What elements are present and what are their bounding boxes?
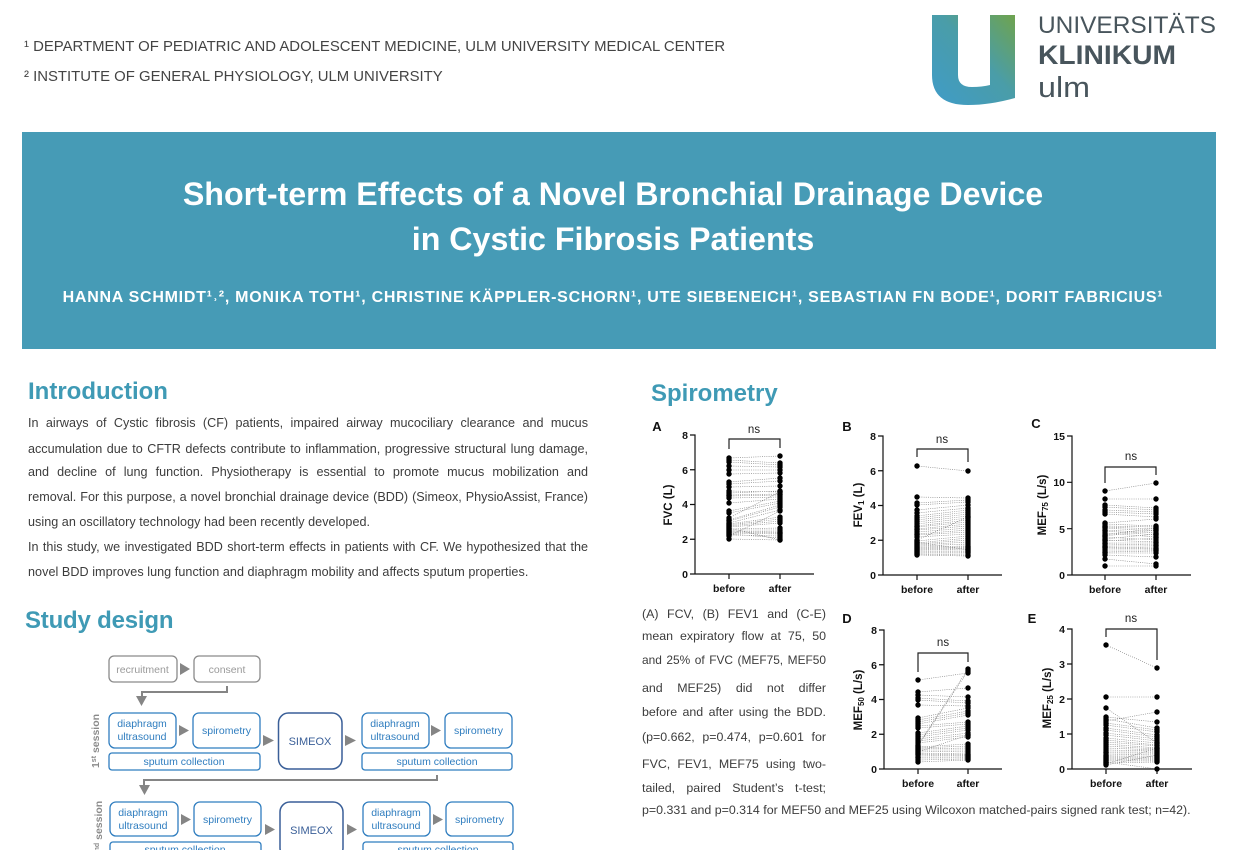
chart B: FEV1: (L) xyxy=(853,482,865,501)
introduction text: accumulation due to CFTR defects contribute to inflammation, progressive structural lung damage, xyxy=(28,442,588,456)
chart B: FEV1: 1 xyxy=(857,500,866,505)
introduction text: and decline of lung function. Physiotherapy is essential to promote mucus mobilization and xyxy=(28,465,588,479)
step: spirometry, session 1 after xyxy=(445,713,512,748)
chart C: MEF75: 5 xyxy=(1059,524,1065,536)
chart B: FEV1: 6 xyxy=(870,466,876,478)
step: spirometry, session 2 after: spirometry xyxy=(455,814,505,826)
chart C: MEF75: (L/s) xyxy=(1037,475,1049,502)
step: diaphragm ultrasound, session 2 before xyxy=(110,802,178,836)
arrow xyxy=(265,824,275,835)
chart B: FEV1: B xyxy=(842,419,852,434)
step: spirometry, session 1 before xyxy=(193,713,260,748)
chart D: MEF50: 2 xyxy=(871,729,877,741)
title: Short-term Effects of a Novel Bronchial Drainage Device xyxy=(183,176,1043,212)
logo: Universitätsklinikum Ulm: KLINIKUM xyxy=(1038,40,1176,70)
chart D: MEF50: after xyxy=(957,778,979,790)
spirometry caption: p=0.331 and p=0.314 for MEF50 and MEF25 using Wilcoxon matched-pairs signed rank test; n=42). xyxy=(642,803,1191,817)
step: diaphragm ultrasound, session 2 after xyxy=(363,802,430,836)
chart E: MEF25: 1 xyxy=(1059,729,1065,741)
logo: Universitätsklinikum Ulm: UNIVERSITÄTS xyxy=(1038,12,1216,39)
step: spirometry, session 2 after xyxy=(446,802,513,836)
arrow xyxy=(433,814,443,825)
heading: Introduction: Introduction xyxy=(28,378,168,405)
chart E: MEF25: 0 xyxy=(1059,764,1065,776)
chart A: FVC: after xyxy=(769,583,791,595)
header banner xyxy=(22,132,1216,349)
introduction text xyxy=(28,416,588,579)
heading: Study design: Study design xyxy=(25,607,173,634)
chart A: FVC: 8 xyxy=(682,430,688,442)
spirometry caption xyxy=(642,607,1191,817)
chart C: MEF75: 75 xyxy=(1041,502,1050,511)
chart A: FVC: FVC (L) xyxy=(663,484,675,525)
chart D: MEF50: before xyxy=(902,778,934,790)
chart A: FVC: ns xyxy=(748,424,760,436)
spirometry caption: FVC, FEV1, MEF75 using two- xyxy=(642,757,826,771)
spirometry caption: mean expiratory flow at 75, 50 xyxy=(642,629,826,643)
chart D: MEF50: ns xyxy=(937,637,949,649)
step: diaphragm ultrasound, session 1 before xyxy=(109,713,176,748)
arrow: recruitment to consent xyxy=(180,663,190,675)
step: sputum collection, session 2 before xyxy=(110,842,261,850)
chart C: MEF75: after xyxy=(1145,584,1167,596)
spirometry caption: tailed, paired Student’s t-test; xyxy=(642,781,826,795)
arrow xyxy=(431,725,441,736)
step: spirometry, session 1 after: spirometry xyxy=(454,725,504,737)
chart E: MEF25: 25 xyxy=(1046,695,1055,704)
chart B: FEV1: 4 xyxy=(870,500,876,512)
step: diaphragm ultrasound, session 1 before: diaphragm xyxy=(117,718,167,730)
arrow xyxy=(345,735,356,746)
step: SIMEOX, session 2 xyxy=(280,802,343,850)
label: 2nd session: session xyxy=(93,801,105,843)
chart E: MEF25: ns xyxy=(1125,613,1137,625)
chart B: FEV1 xyxy=(842,419,1002,596)
step: recruitment: recruitment xyxy=(116,664,169,676)
chart C: MEF75: MEF xyxy=(1037,511,1049,535)
chart D: MEF50 xyxy=(842,611,1002,790)
chart A: FVC: before xyxy=(713,583,745,595)
step: consent xyxy=(194,656,260,682)
step: diaphragm ultrasound, session 1 before: ultrasound xyxy=(117,731,167,743)
chart D: MEF50: 0 xyxy=(871,764,877,776)
title xyxy=(183,176,1043,257)
chart D: MEF50: 4 xyxy=(871,694,877,706)
arrow xyxy=(263,735,274,746)
spirometry caption: (p=0.662, p=0.474, p=0.601 for xyxy=(642,730,826,744)
chart B: FEV1: 2 xyxy=(870,535,876,547)
step: diaphragm ultrasound, session 1 after xyxy=(362,713,429,748)
chart E: MEF25: before xyxy=(1090,778,1122,790)
chart C: MEF75: 0 xyxy=(1059,570,1065,582)
step: sputum collection, session 1 before xyxy=(109,753,260,770)
introduction text: In this study, we investigated BDD short-term effects in patients with CF. We hypothesized that the xyxy=(28,540,588,554)
label: 1st session: session xyxy=(90,714,102,756)
step: spirometry, session 2 before: spirometry xyxy=(203,814,253,826)
step: spirometry, session 2 before xyxy=(194,802,261,836)
step: SIMEOX, session 2: SIMEOX xyxy=(290,825,334,837)
spirometry caption: before and after using the BDD. xyxy=(642,705,826,719)
spirometry caption: and 25% of FVC (MEF75, MEF50 xyxy=(642,653,826,667)
chart D: MEF50: (L/s) xyxy=(853,670,865,697)
chart C: MEF75: ns xyxy=(1125,451,1137,463)
introduction text: novel BDD improves lung function and diaphragm mobility and affects sputum properties. xyxy=(28,565,528,579)
spirometry caption: (A) FCV, (B) FEV1 and (C-E) xyxy=(642,607,826,621)
chart B: FEV1: 0 xyxy=(870,570,876,582)
chart C: MEF75 xyxy=(1031,416,1191,596)
chart E: MEF25: 3 xyxy=(1059,659,1065,671)
logo: Universitätsklinikum Ulm xyxy=(932,12,1216,105)
introduction text: using an oscillatory technology had been recently developed. xyxy=(28,515,370,529)
label: 1st session: 1 xyxy=(90,762,102,768)
arrow xyxy=(179,725,189,736)
arrow: consent to first session xyxy=(136,686,227,706)
step: SIMEOX, session 1 xyxy=(278,713,342,769)
chart E: MEF25 xyxy=(1028,611,1192,790)
chart D: MEF50: 50 xyxy=(857,697,866,706)
step: diaphragm ultrasound, session 2 before: diaphragm xyxy=(118,807,168,819)
heading: Spirometry: Spirometry xyxy=(651,380,778,407)
chart C: MEF75: 10 xyxy=(1053,477,1065,489)
arrow: first to second session xyxy=(139,775,437,795)
chart A: FVC: 4 xyxy=(682,499,688,511)
chart B: FEV1: after xyxy=(957,584,979,596)
chart E: MEF25: 4 xyxy=(1059,624,1065,636)
step: sputum collection, session 1 before: sputum collection xyxy=(143,756,225,768)
title: in Cystic Fibrosis Patients xyxy=(412,221,814,257)
flow diagram: study design xyxy=(90,656,513,850)
step: diaphragm ultrasound, session 1 after: diaphragm xyxy=(370,718,420,730)
chart A: FVC: 0 xyxy=(682,569,688,581)
arrow xyxy=(347,824,357,835)
step: spirometry, session 1 before: spirometry xyxy=(202,725,252,737)
chart B: FEV1: ns xyxy=(936,434,948,446)
step: consent: consent xyxy=(209,664,245,676)
step: diaphragm ultrasound, session 2 before: ultrasound xyxy=(118,820,168,832)
step: sputum collection, session 1 after xyxy=(362,753,512,770)
chart D: MEF50: 6 xyxy=(871,660,877,672)
chart C: MEF75: C xyxy=(1031,416,1041,431)
chart A: FVC: 6 xyxy=(682,465,688,477)
step: SIMEOX, session 1: SIMEOX xyxy=(289,736,332,748)
chart D: MEF50: 8 xyxy=(871,625,877,637)
authors: HANNA SCHMIDT¹˒², MONIKA TOTH¹, CHRISTINE KÄPPLER-SCHORN¹, UTE SIEBENEICH¹, SEBASTIAN FN BODE¹, DORIT FABRICIUS¹ xyxy=(63,289,1163,306)
chart A: FVC: 2 xyxy=(682,534,688,546)
chart B: FEV1: 8 xyxy=(870,431,876,443)
step: diaphragm ultrasound, session 2 after: ultrasound xyxy=(371,820,421,832)
affiliation 1: ¹ DEPARTMENT OF PEDIATRIC AND ADOLESCENT MEDICINE, ULM UNIVERSITY MEDICAL CENTER xyxy=(24,39,725,55)
chart B: FEV1: FEV xyxy=(853,505,865,527)
chart A: FVC xyxy=(652,419,814,595)
chart D: MEF50: D xyxy=(842,611,852,626)
chart D: MEF50: MEF xyxy=(853,706,865,730)
chart E: MEF25: E xyxy=(1028,611,1037,626)
step: sputum collection, session 1 after: sputum collection xyxy=(396,756,478,768)
step: diaphragm ultrasound, session 1 after: ultrasound xyxy=(370,731,420,743)
logo: Universitätsklinikum Ulm: ulm xyxy=(1038,72,1090,104)
step: diaphragm ultrasound, session 2 after: diaphragm xyxy=(371,807,421,819)
chart B: FEV1: before xyxy=(901,584,933,596)
affiliation 2: ² INSTITUTE OF GENERAL PHYSIOLOGY, ULM UNIVERSITY xyxy=(24,69,443,85)
chart E: MEF25: 2 xyxy=(1059,694,1065,706)
step: recruitment xyxy=(109,656,177,682)
chart E: MEF25: (L/s) xyxy=(1042,668,1054,695)
chart C: MEF75: 15 xyxy=(1053,431,1065,443)
chart A: FVC: A xyxy=(652,419,662,434)
chart E: MEF25: after xyxy=(1146,778,1168,790)
chart C: MEF75: before xyxy=(1089,584,1121,596)
introduction text: In airways of Cystic fibrosis (CF) patients, impaired airway mucociliary clearance and mucus xyxy=(28,416,588,430)
label: 1st session: st xyxy=(91,755,98,762)
introduction text: removal. For this purpose, a novel bronchial drainage device (BDD) (Simeox, PhysioAssist, France) xyxy=(28,490,588,504)
arrow xyxy=(181,814,191,825)
step: sputum collection, session 2 after xyxy=(363,842,513,850)
chart E: MEF25: MEF xyxy=(1042,704,1054,728)
spirometry caption: and MEF25) did not differ xyxy=(642,681,826,695)
